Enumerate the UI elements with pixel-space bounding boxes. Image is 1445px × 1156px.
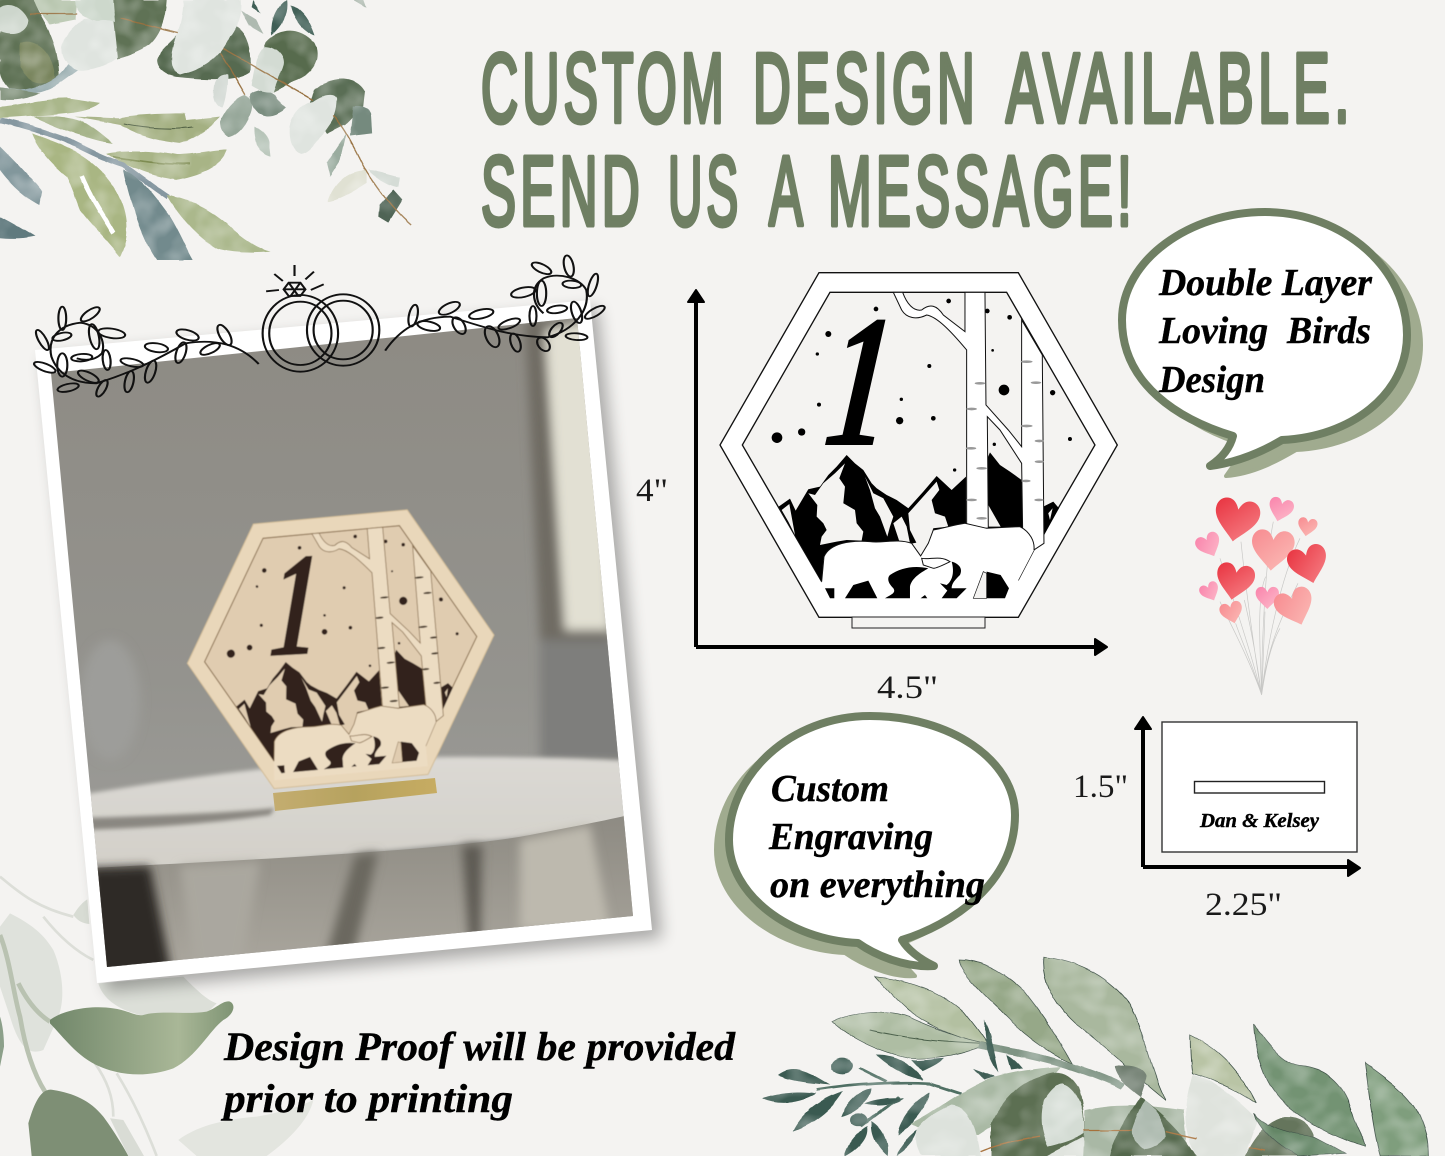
chart: hexagon size diagram with axes [636, 273, 1117, 706]
left vine [32, 305, 259, 398]
text block: design proof note: Design Proof will be provided [223, 1024, 736, 1069]
line drawing of the hexagon sign [720, 273, 1117, 617]
title: custom design available [481, 33, 1354, 246]
bubble text: Loving Birds [1158, 310, 1371, 352]
icon: heart balloons bouquet [1193, 495, 1332, 695]
heart balloons [1193, 495, 1332, 631]
chart: nameplate size diagram [1073, 717, 1360, 923]
photo drop shadow [43, 308, 662, 991]
bubble text: Double Layer [1158, 262, 1373, 304]
bubble text [1158, 262, 1373, 401]
bubble text: Custom [771, 768, 889, 810]
foliage: bottom right watercolor leaves [762, 957, 1428, 1156]
engraved numeral: 1 [266, 522, 325, 689]
speech bubble: custom engraving [716, 716, 1015, 976]
diamond with sparkle rays [266, 265, 324, 296]
right vine [385, 255, 607, 353]
height label: 1.5" [1073, 769, 1128, 805]
title: custom design available: MESSAGE! [828, 136, 1136, 246]
panel: tilted product photo [30, 300, 662, 991]
wooden base stand [273, 778, 437, 811]
balloon strings [1220, 522, 1300, 695]
foliage: bottom left watercolor leaves [0, 877, 313, 1156]
text block: design proof note: prior to printing [221, 1076, 513, 1121]
nameplate card [1162, 722, 1357, 852]
wooden hexagon number sign [177, 503, 504, 796]
bubble text [768, 768, 985, 906]
bubble text: on everything [770, 864, 985, 906]
engraved name: Dan & Kelsey [1199, 810, 1319, 832]
photo white frame [35, 300, 652, 983]
decoration: wedding rings and vine wreath line art [32, 255, 607, 398]
width label: 4.5" [877, 670, 938, 706]
photo scene [51, 318, 633, 967]
interlocked rings [263, 294, 379, 372]
bubble text: Design [1158, 359, 1265, 401]
text block: design proof note [221, 1024, 736, 1121]
foliage: top left watercolor leaves [0, 0, 411, 260]
numeral one: 1 [818, 277, 904, 487]
bubble text: Engraving [768, 816, 933, 858]
speech bubble: double layer design [1122, 212, 1421, 476]
base stand outline [852, 617, 985, 628]
title: custom design available: CUSTOM [481, 33, 728, 143]
title: custom design available: A [769, 136, 807, 246]
bubble shadow [716, 726, 1002, 976]
height and width arrows [1135, 717, 1360, 876]
title: custom design available: SEND [481, 136, 644, 246]
bubble body [729, 716, 1015, 966]
height and width arrows [688, 290, 1107, 655]
bubble shadow [1136, 222, 1421, 476]
title: custom design available: DESIGN [753, 33, 979, 143]
bubble body [1122, 212, 1407, 466]
title: custom design available: US [668, 136, 742, 246]
width label: 2.25" [1205, 887, 1282, 923]
slot [1194, 782, 1324, 793]
height label: 4" [636, 473, 668, 509]
